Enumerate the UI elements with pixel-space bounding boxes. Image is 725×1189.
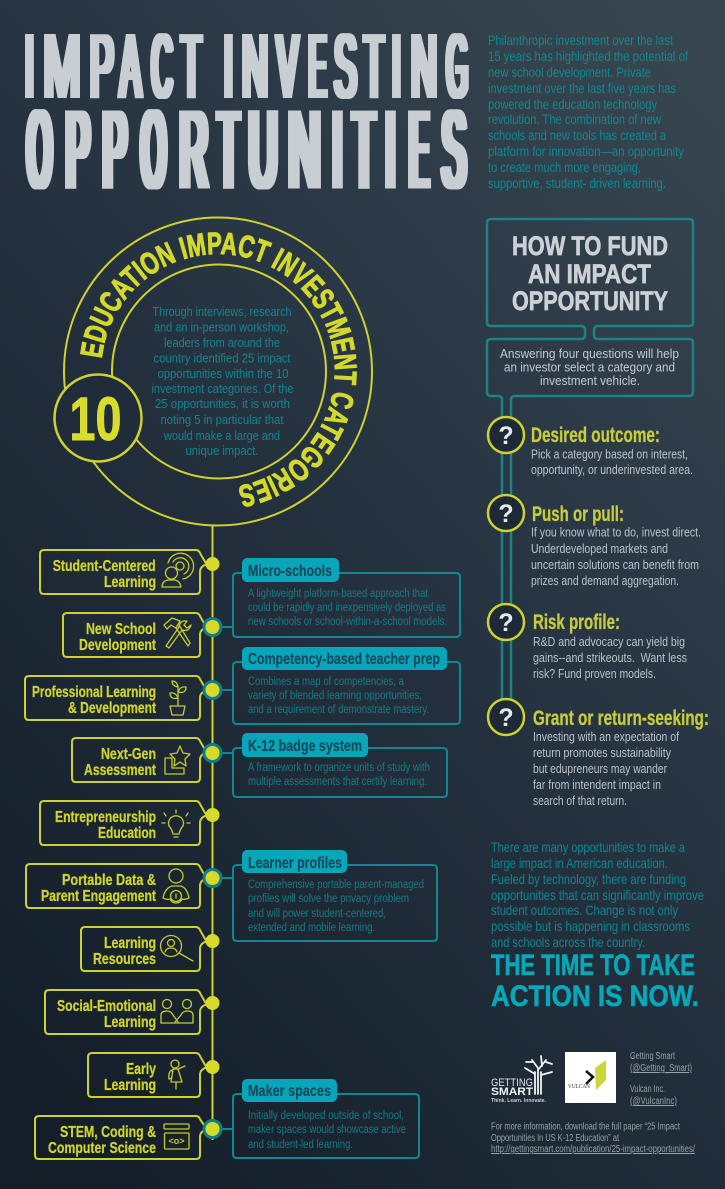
category: STEM, Coding & Computer Science — [35, 1116, 209, 1159]
panel: how to fund — [487, 219, 693, 700]
title: C — [152, 17, 172, 117]
text: G — [447, 17, 468, 117]
category: Early Learning: Early — [126, 1061, 156, 1078]
intro text: supportive, student- driven learning. — [488, 176, 666, 191]
logo: Getting Smart: Think. Learn. Innovate. — [491, 1098, 546, 1104]
description — [500, 346, 679, 388]
question: Desired outcome — [488, 417, 693, 477]
panel: Learner profiles — [204, 850, 437, 941]
category: STEM, Coding & Computer Science: Computer Science — [48, 1140, 156, 1157]
panel: Micro-schools — [204, 558, 460, 637]
question: Push or pull: Push or pull: — [532, 503, 624, 526]
description: Answering four questions will help — [500, 346, 679, 361]
panel: K-12 badge system: multiple assessments that certify learning. — [248, 776, 427, 788]
category: Next-Gen Assessment — [72, 738, 209, 782]
title: T — [364, 17, 384, 117]
logo: Getting Smart: SMART — [491, 1086, 533, 1098]
call to action — [491, 949, 699, 1013]
title: V — [277, 17, 298, 117]
icon: hammer and wrench — [164, 618, 191, 648]
icon: child with backpack — [169, 1060, 185, 1089]
description: investment vehicle. — [540, 373, 640, 388]
category: Early Learning — [88, 1053, 220, 1097]
circle text: country identified 25 impact — [154, 350, 291, 366]
panel: Maker spaces: maker spaces would showcase active — [248, 1124, 406, 1136]
question: Grant or return-seeking: but edupreneurs may wander — [533, 761, 668, 776]
circle text: leaders from around the — [164, 335, 280, 350]
question: Risk profile: risk? Fund proven models. — [533, 666, 656, 681]
title: N — [242, 17, 268, 117]
category: Next-Gen Assessment: Assessment — [84, 762, 156, 779]
question: Grant or return-seeking — [488, 699, 709, 808]
panel: K-12 badge system: K-12 badge system — [248, 738, 362, 755]
intro text: Philanthropic investment over the last — [488, 33, 673, 48]
panel: Learner profiles: profiles will solve the privacy problem — [248, 893, 409, 905]
icon: magnifier with person — [160, 936, 193, 961]
title: S — [334, 17, 357, 117]
category: New School Development — [63, 613, 209, 657]
intro text: investment over the last five years has — [488, 81, 676, 96]
icon: light bulb — [162, 810, 190, 837]
title: U — [249, 89, 277, 212]
category: Student-Centered Learning: Learning — [104, 574, 156, 591]
icon: potted plant — [170, 681, 186, 715]
intro text: powered the education technology — [488, 97, 657, 112]
icon: two people shaking hands — [161, 1000, 193, 1023]
circle text: Through interviews, research — [152, 304, 292, 319]
title: T — [218, 89, 239, 212]
circle text: unique impact. — [186, 443, 258, 458]
title: M — [43, 17, 81, 117]
title: I — [25, 17, 34, 117]
text: S — [442, 89, 466, 212]
question: Grant or return-seeking: Investing with an expectation of — [533, 729, 679, 744]
circle: education impact investment categories — [53, 216, 373, 526]
social handles — [630, 1051, 692, 1107]
intro text: revolution. The combination of new — [488, 112, 661, 127]
title: P — [66, 89, 90, 212]
logo: Vulcan: VULCAN — [568, 1084, 591, 1090]
social handles: Vulcan Inc. — [630, 1084, 665, 1095]
question: Risk profile: gains--and strikeouts. Want less — [533, 650, 687, 665]
intro text: new school development. Private — [488, 65, 651, 80]
panel: Micro-schools: new schools or school-within-a-school models. — [248, 616, 447, 628]
title: O — [27, 89, 51, 212]
panel: Competency-based teacher prep: and a requirement of demonstrate mastery. — [248, 704, 429, 716]
category: Social-Emotional Learning: Learning — [104, 1014, 156, 1031]
heading: AN IMPACT — [528, 259, 651, 289]
logo: Getting Smart: GETTING — [491, 1077, 533, 1089]
category: Professional Learning & Development: & Development — [68, 700, 156, 717]
question: Desired outcome: ? — [498, 422, 514, 450]
category spine line — [212, 526, 214, 1140]
closing text: large impact in American education. — [491, 855, 668, 871]
heading: HOW TO FUND — [512, 231, 668, 261]
panel: Maker spaces: Maker spaces — [248, 1083, 331, 1100]
title: N — [411, 17, 437, 117]
logo: Vulcan — [565, 1052, 616, 1103]
category: Student-Centered Learning — [40, 550, 220, 594]
panel: Competency-based teacher prep: Competency-based teacher prep — [248, 651, 440, 668]
intro text: to create much more engaging, — [488, 160, 641, 175]
category: New School Development: New School — [86, 621, 156, 638]
question: Risk profile: ? — [498, 609, 514, 637]
circle text: opportunities within the 10 — [158, 366, 288, 381]
category: Entrepreneurship Education: Entrepreneurship — [55, 809, 156, 826]
circle text: and an in-person workshop, — [154, 320, 289, 334]
question: Grant or return-seeking: search of that return. — [533, 793, 627, 808]
heading: OPPORTUNITY — [512, 286, 668, 316]
category: Learning Resources — [81, 927, 220, 971]
question: Risk profile: R&D and advocacy can yield big — [533, 634, 685, 649]
icon: star and stairs — [165, 746, 190, 774]
title: N — [288, 89, 321, 212]
category: STEM, Coding & Computer Science: STEM, Coding & — [60, 1124, 156, 1141]
panel: K-12 badge system — [204, 733, 447, 797]
number badge — [54, 374, 142, 462]
panel: Maker spaces — [204, 1079, 419, 1158]
title: A — [120, 17, 141, 117]
category: New School Development: Development — [79, 637, 156, 654]
circle text: investment categories. Of the — [152, 381, 294, 396]
title — [25, 17, 468, 212]
circle text: noting 5 in particular that — [160, 412, 284, 427]
intro text: platform for innovation—an opportunity — [488, 144, 684, 159]
title: E — [410, 89, 428, 212]
panel: Competency-based teacher prep: Combines a map of competencies, a — [248, 676, 405, 688]
category: Social-Emotional Learning: Social-Emotional — [57, 998, 156, 1015]
title: I — [333, 89, 342, 212]
panel: Maker spaces: and student-led learning. — [248, 1139, 353, 1151]
social handles: (@VulcanInc) — [630, 1096, 677, 1107]
panel: Learner profiles: Comprehensive portable parent-managed — [248, 879, 424, 891]
footer note — [491, 1122, 695, 1155]
intro text: schools and new tools has created a — [488, 128, 666, 143]
circle text — [152, 304, 294, 458]
panel: Maker spaces: Initially developed outside of school, — [248, 1110, 404, 1122]
question: Push or pull: prizes and demand aggregation. — [531, 573, 679, 588]
title: I — [392, 17, 401, 117]
icon: code window — [164, 1124, 189, 1149]
panel: Micro-schools: Micro-schools — [248, 563, 332, 580]
icon: code window: <o> — [168, 1136, 185, 1146]
question: Desired outcome: Desired outcome: — [531, 424, 660, 447]
panel: Micro-schools: could be rapidly and inexpensively deployed as — [248, 602, 446, 614]
question: Push or pull: ? — [498, 500, 514, 528]
category: Early Learning: Learning — [104, 1077, 156, 1094]
category: Learning Resources: Learning — [104, 935, 156, 952]
panel: Micro-schools: A lightweight platform-based approach that — [248, 588, 429, 600]
category: Learning Resources: Resources — [93, 951, 156, 968]
intro text — [488, 33, 688, 191]
panel: Learner profiles: Learner profiles — [248, 855, 342, 872]
category: Social-Emotional Learning — [45, 990, 220, 1034]
closing text: and schools across the country. — [491, 934, 645, 950]
panel: Learner profiles: extended and mobile learning. — [248, 922, 375, 934]
category: Entrepreneurship Education — [40, 801, 220, 845]
footer note: Opportunities In US K-12 Education” at — [491, 1133, 619, 1144]
social handles: Getting Smart — [630, 1051, 675, 1062]
category: Entrepreneurship Education: Education — [98, 825, 156, 842]
circle text: would make a large and — [163, 428, 280, 443]
title: T — [353, 89, 375, 212]
category: Professional Learning & Development — [25, 676, 209, 720]
panel: K-12 badge system: A framework to organize units of study with — [248, 762, 430, 774]
category: Portable Data & Parent Engagement: Parent Engagement — [41, 888, 156, 905]
closing text: student outcomes. Change is not only — [491, 902, 678, 918]
title: E — [309, 17, 326, 117]
icon: target and learner — [162, 553, 194, 587]
panel: Learner profiles: and will power student-centered, — [248, 908, 386, 920]
heading — [512, 231, 668, 316]
title: P — [103, 89, 127, 212]
question: Risk profile: Risk profile: — [533, 611, 620, 634]
logo: Getting Smart — [491, 1056, 552, 1104]
social handles: (@Getting_Smart) — [630, 1063, 692, 1074]
title: T — [181, 17, 201, 117]
question: Grant or return-seeking: ? — [498, 704, 514, 732]
title: O — [141, 89, 165, 212]
question: Risk profile — [488, 604, 687, 681]
category: Professional Learning & Development: Professional Learning — [32, 684, 156, 701]
curved heading: EDUCATION IMPACT INVESTMENT CATEGORIES — [80, 232, 357, 507]
intro text: 15 years has highlighted the potential of — [488, 49, 688, 64]
panel: Competency-based teacher prep: variety of blended learning opportunities, — [248, 690, 422, 702]
title: P — [90, 17, 114, 117]
closing text — [491, 839, 704, 950]
icon: person with info — [163, 869, 189, 903]
question: Push or pull: Underdeveloped markets and — [531, 541, 668, 556]
question: Grant or return-seeking: return promotes sustainability — [533, 745, 671, 760]
call to action: ACTION IS NOW. — [491, 980, 699, 1013]
question: Desired outcome: Pick a category based on interest, — [531, 446, 688, 462]
title: I — [386, 89, 395, 212]
question: Push or pull — [488, 495, 701, 588]
panel: Competency-based teacher prep — [204, 647, 460, 724]
description: an investor select a category and — [504, 360, 675, 374]
category: Student-Centered Learning: Student-Centered — [53, 558, 156, 575]
circle text: 25 opportunities, it is worth — [155, 396, 290, 411]
category: Portable Data & Parent Engagement: Portable Data & — [62, 872, 156, 889]
category: Portable Data & Parent Engagement — [26, 864, 209, 908]
number badge: 10 — [70, 385, 122, 453]
title: R — [180, 89, 208, 212]
title: I — [224, 17, 233, 117]
question: Grant or return-seeking: far from intendent impact in — [533, 777, 661, 792]
category: Next-Gen Assessment: Next-Gen — [101, 746, 156, 763]
